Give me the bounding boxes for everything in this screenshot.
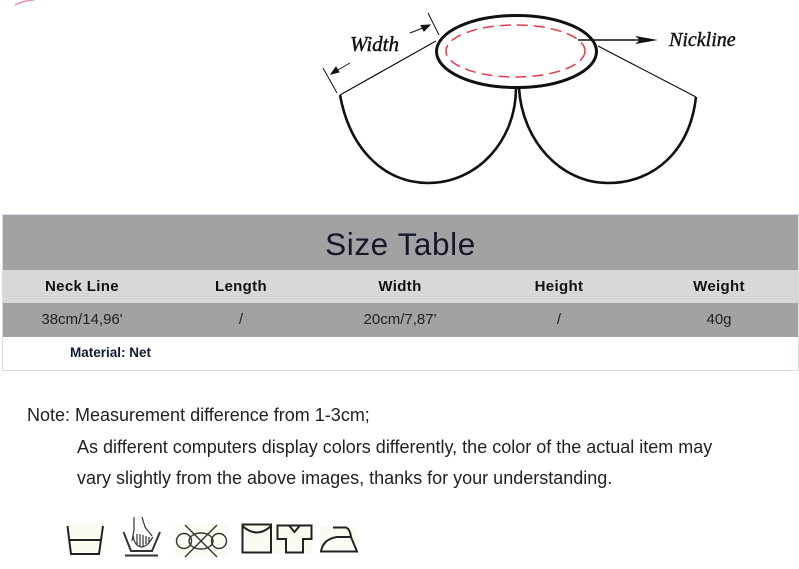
right collar panel bbox=[519, 46, 696, 183]
width measurement arrows bbox=[323, 13, 439, 93]
note body line 2: vary slightly from the above images, thanks for your understanding. bbox=[77, 468, 612, 488]
note heading line: Note: Measurement difference from 1-3cm; bbox=[27, 405, 370, 425]
column headers bbox=[3, 270, 798, 303]
care icons bbox=[66, 516, 358, 558]
icon: do not wring bbox=[176, 525, 226, 557]
column headers: Weight bbox=[693, 278, 745, 295]
column headers: Neck Line bbox=[45, 278, 119, 295]
data row bbox=[3, 303, 798, 337]
data row: 38cm/14,96' bbox=[41, 311, 123, 328]
icon: hand wash bbox=[124, 517, 160, 556]
data row: / bbox=[239, 311, 243, 328]
table title bbox=[3, 215, 798, 270]
data row: / bbox=[557, 311, 561, 328]
material row: Material: Net bbox=[70, 345, 151, 360]
column headers: Length bbox=[215, 278, 267, 295]
size table bbox=[2, 214, 799, 371]
data row: 20cm/7,87' bbox=[364, 311, 436, 328]
column headers: Height bbox=[535, 278, 583, 295]
neckline dashed red ellipse bbox=[446, 25, 585, 77]
table title: Size Table bbox=[325, 226, 476, 262]
data row: 40g bbox=[706, 311, 732, 328]
nickline label: Nickline bbox=[668, 29, 736, 51]
icon: drying bag bbox=[242, 524, 271, 552]
icon: wash basin bbox=[68, 526, 103, 554]
collar neck outline bbox=[436, 16, 596, 88]
note body line 1: As different computers display colors differently, the color of the actual item may bbox=[77, 437, 712, 457]
decorative pink swoosh remnant bbox=[14, 0, 34, 6]
nickline arrow bbox=[578, 36, 658, 44]
left collar panel bbox=[340, 41, 516, 183]
width label: Width bbox=[350, 32, 399, 56]
icon: iron bbox=[321, 528, 357, 552]
column headers: Width bbox=[378, 278, 422, 295]
diagram: collar with measurements bbox=[322, 12, 736, 184]
icon: t-shirt bbox=[278, 526, 312, 552]
